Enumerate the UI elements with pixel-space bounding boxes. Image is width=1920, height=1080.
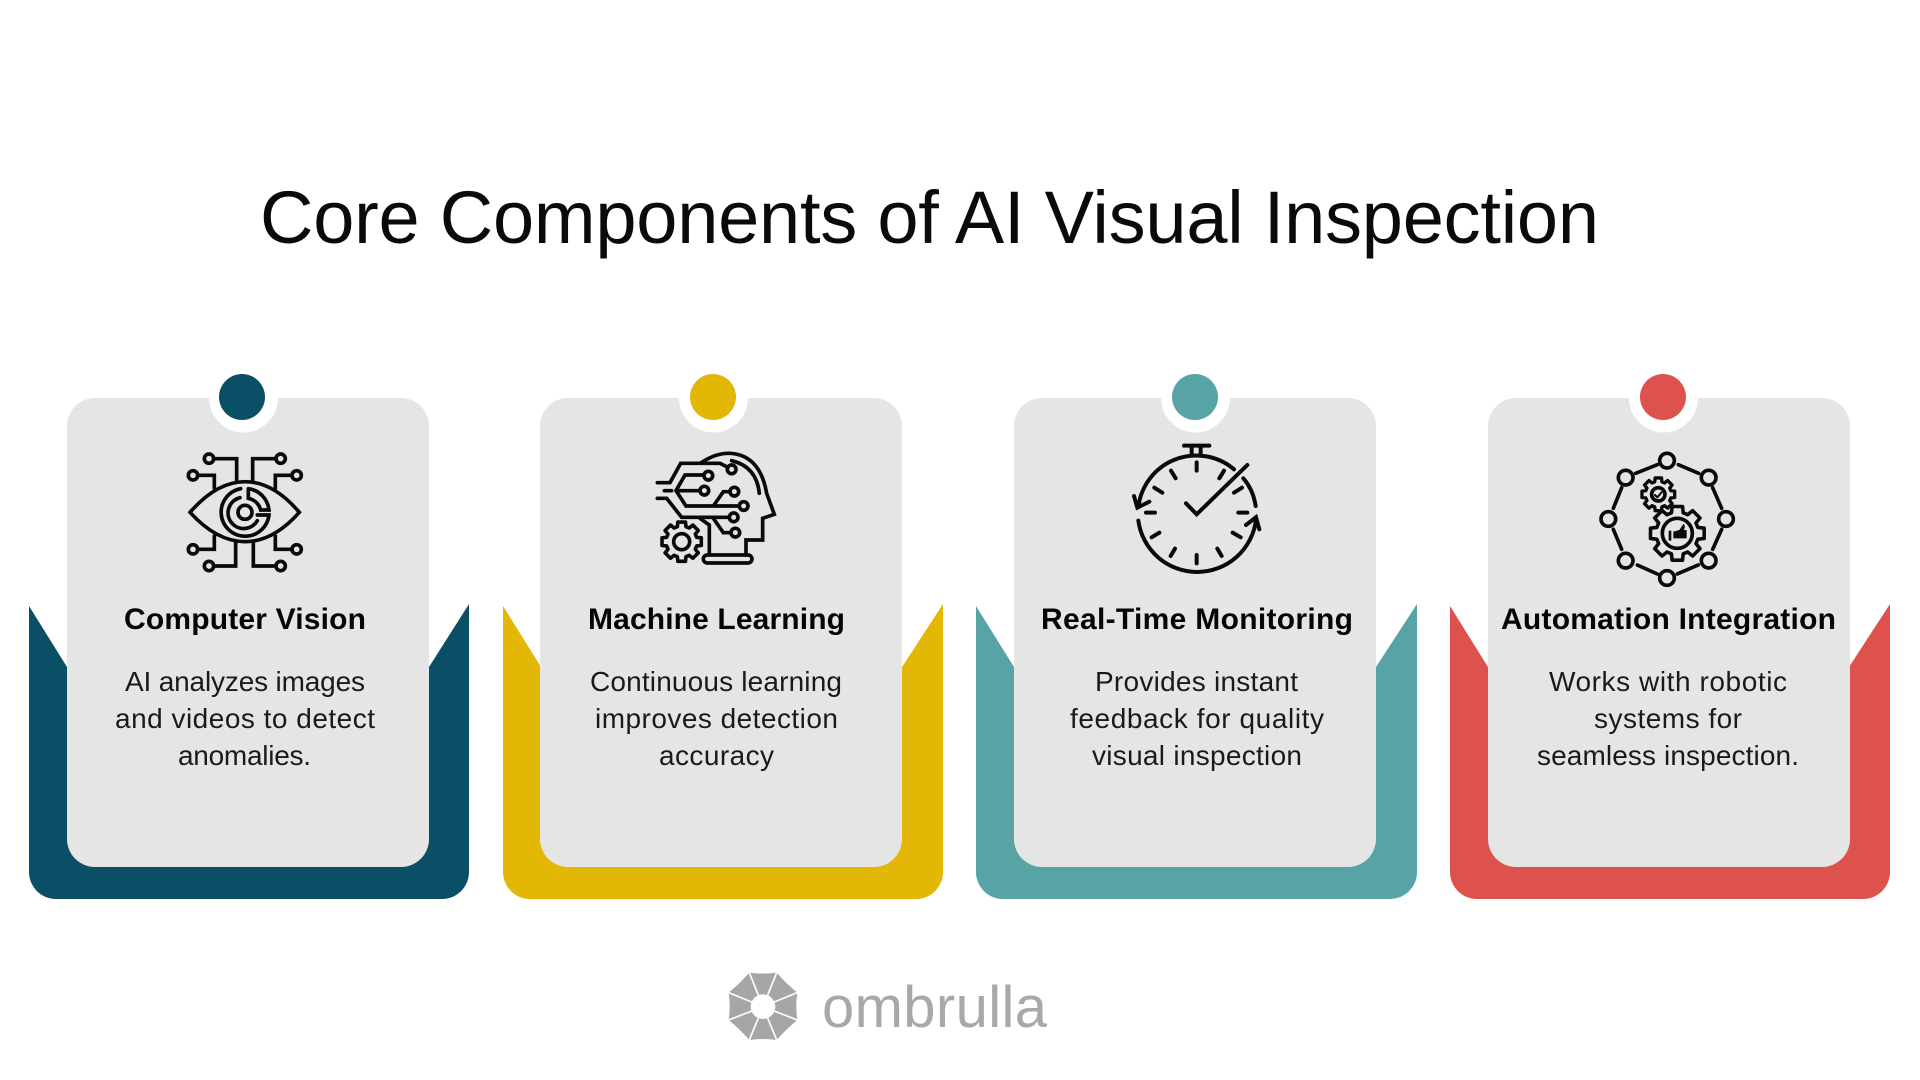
gray card: [67, 398, 429, 867]
description: [1070, 666, 1324, 771]
heading: Real-Time Monitoring: [1041, 603, 1353, 636]
heading: Computer Vision: [124, 603, 366, 636]
icon: stopwatch with check: [1134, 446, 1259, 572]
description: [1537, 666, 1799, 771]
description: accuracy: [659, 740, 774, 771]
colored backing shape: [503, 604, 943, 899]
colored backing shape: [1450, 604, 1890, 899]
description: improves detection: [595, 703, 838, 734]
description: anomalies.: [178, 740, 311, 771]
icon: eye with circuits: [188, 454, 301, 571]
description: systems for: [1594, 703, 1742, 734]
description: seamless inspection.: [1537, 740, 1799, 771]
marker dot: [219, 374, 265, 420]
gray card: [540, 398, 902, 867]
description: Works with robotic: [1549, 666, 1787, 697]
gray card: [1014, 398, 1376, 867]
description: feedback for quality: [1070, 703, 1324, 734]
description: visual inspection: [1092, 740, 1302, 771]
panel: real-time monitoring: [976, 364, 1417, 899]
white notch: [679, 364, 748, 432]
icon: gears in node ring: [1601, 453, 1733, 585]
icon: umbrella mark: [729, 973, 797, 1040]
description: AI analyzes images: [125, 666, 365, 697]
icon: AI head with gear: [657, 453, 774, 563]
wordmark: ombrulla: [822, 975, 1048, 1040]
description: Continuous learning: [590, 666, 842, 697]
panel: computer vision: [29, 364, 469, 899]
description: and videos to detect: [115, 703, 375, 734]
panel: automation integration: [1450, 364, 1890, 899]
description: [590, 666, 842, 771]
marker dot: [1640, 374, 1686, 420]
white notch: [209, 364, 278, 432]
heading: Machine Learning: [588, 603, 845, 636]
description: Provides instant: [1095, 666, 1298, 697]
title: Core Components of AI Visual Inspection: [260, 176, 1599, 259]
logo: ombrulla: [729, 973, 1048, 1040]
colored backing shape: [976, 604, 1417, 899]
marker dot: [1172, 374, 1218, 420]
marker dot: [690, 374, 736, 420]
description: [115, 666, 375, 771]
panel: machine learning: [503, 364, 943, 899]
white notch: [1161, 364, 1230, 432]
colored backing shape: [29, 604, 469, 899]
gray card: [1488, 398, 1850, 867]
white notch: [1629, 364, 1698, 432]
heading: Automation Integration: [1501, 603, 1836, 636]
